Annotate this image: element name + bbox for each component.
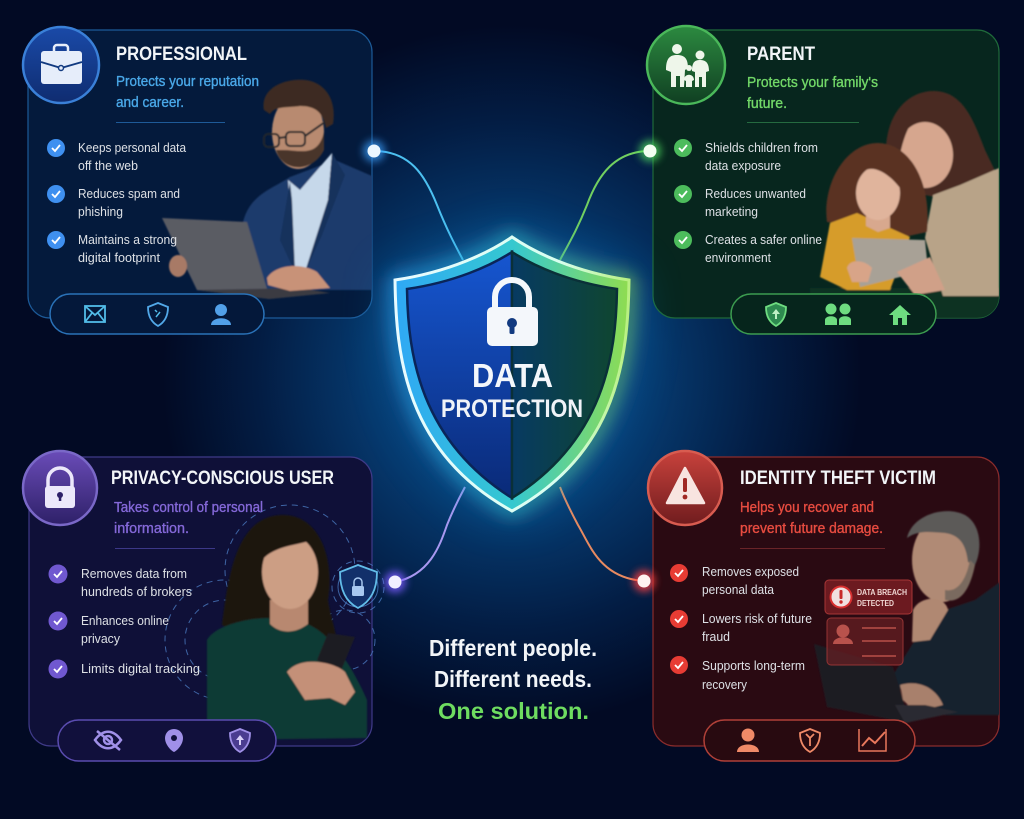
shield title: DATA (472, 357, 553, 394)
heading: IDENTITY THEFT VICTIM (740, 468, 936, 489)
photo: man with laptop (162, 80, 372, 299)
shield title: PROTECTION (441, 395, 583, 423)
benefits list: hundreds of brokers (81, 585, 192, 599)
benefits list: Shields children from (705, 141, 818, 155)
subtitle: information. (114, 521, 189, 537)
subtitle: Takes control of personal (114, 500, 263, 516)
icon: briefcase (41, 45, 82, 84)
benefits list (48, 564, 200, 678)
subtitle: prevent future damage. (740, 521, 883, 537)
subtitle (114, 500, 263, 537)
panel: parent (647, 26, 1000, 334)
icon: mini shield (340, 565, 377, 608)
badge: family (647, 26, 725, 104)
connector: parent (560, 140, 661, 260)
connector: privacy (384, 487, 465, 593)
icon: family (666, 44, 709, 87)
heading: PARENT (747, 44, 815, 65)
benefits list: recovery (702, 678, 748, 692)
badge: briefcase (23, 27, 99, 103)
subtitle (747, 75, 878, 112)
icon: hidden eye (95, 731, 121, 750)
benefits list: environment (705, 251, 771, 265)
decorative rings and mini shield (165, 505, 384, 700)
benefits list: marketing (705, 205, 758, 219)
benefits list: fraud (702, 630, 730, 644)
benefits list: Reduces spam and (78, 187, 180, 201)
central shield (395, 237, 629, 511)
benefits list: Removes data from (81, 567, 187, 581)
icon: location pin (165, 729, 183, 752)
subtitle (116, 74, 259, 111)
badge: warning (648, 451, 722, 525)
icon: chart (859, 729, 886, 751)
benefits list: Removes exposed (702, 565, 799, 579)
panel: privacy-conscious user (23, 451, 384, 761)
connector: professional (363, 140, 463, 260)
icon: padlock (487, 280, 538, 346)
alert: data breach (825, 580, 912, 614)
icon: user (737, 728, 759, 752)
benefits list (670, 564, 812, 692)
icon: warning triangle (667, 468, 704, 503)
benefits list: Supports long-term (702, 659, 805, 673)
subtitle: Protects your family's (747, 75, 878, 91)
benefits list: Enhances online (81, 614, 169, 628)
benefits list: privacy (81, 632, 121, 646)
subtitle: future. (747, 96, 787, 112)
subtitle (740, 500, 883, 537)
tagline: One solution. (438, 698, 589, 724)
icon bar (731, 294, 936, 334)
icon: shield (148, 303, 168, 326)
photo: mother and child (810, 91, 1000, 318)
icon bar (50, 294, 264, 334)
alert: data breach: DETECTED (857, 599, 894, 608)
icon: shield (800, 729, 820, 752)
profile card (827, 618, 903, 665)
benefits list (47, 139, 186, 265)
photo: worried man with laptop (814, 511, 1000, 723)
heading: PROFESSIONAL (116, 44, 247, 65)
benefits list: Limits digital tracking (81, 662, 200, 676)
icon bar (58, 720, 276, 761)
benefits list (674, 139, 822, 265)
benefits list: phishing (78, 205, 123, 219)
icon: house (889, 305, 911, 325)
subtitle: Helps you recover and (740, 500, 874, 516)
icon: lock (45, 468, 75, 508)
benefits list: Creates a safer online (705, 233, 822, 247)
connector: identity (560, 487, 655, 592)
icon: people (825, 304, 851, 325)
icon: user (211, 304, 231, 325)
subtitle: Protects your reputation (116, 74, 259, 90)
subtitle: and career. (116, 95, 184, 111)
benefits list: data exposure (705, 159, 781, 173)
benefits list: personal data (702, 583, 774, 597)
benefits list: Maintains a strong (78, 233, 177, 247)
photo: woman with phone (207, 515, 367, 740)
icon: shield (230, 729, 250, 752)
benefits list: Lowers risk of future (702, 612, 812, 626)
icon: shield (766, 303, 786, 326)
shield title (441, 357, 583, 423)
benefits list: Keeps personal data (78, 141, 186, 155)
benefits list: off the web (78, 159, 138, 173)
panel: identity theft victim (648, 451, 1000, 761)
tagline: Different people. (429, 635, 597, 661)
panel: professional (23, 27, 372, 334)
icon bar (704, 720, 915, 761)
benefits list: digital footprint (78, 251, 161, 265)
tagline (429, 635, 597, 724)
benefits list: Reduces unwanted (705, 187, 806, 201)
icon: mail (85, 306, 105, 322)
alert: data breach: DATA BREACH (857, 588, 907, 597)
tagline: Different needs. (434, 666, 592, 692)
heading: PRIVACY-CONSCIOUS USER (111, 468, 334, 489)
badge: lock (23, 451, 97, 525)
